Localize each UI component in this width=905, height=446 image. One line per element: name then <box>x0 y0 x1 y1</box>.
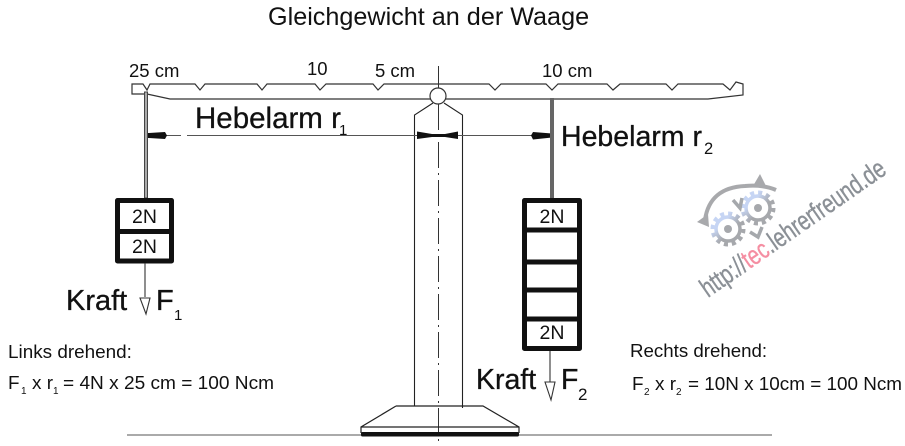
left weight group <box>118 92 172 314</box>
F1 subscript: 1 <box>21 386 27 397</box>
gear left <box>713 214 743 244</box>
pivot <box>430 88 446 104</box>
label: Hebelarm r <box>195 102 341 135</box>
F2: F <box>632 374 644 395</box>
label 10 cm: 10 cm <box>542 60 592 81</box>
force arrow F2 <box>545 351 555 400</box>
centre line <box>438 66 440 442</box>
left formula <box>8 342 274 397</box>
label: Kraft <box>66 285 127 317</box>
heading: lever arm r1 <box>195 102 347 139</box>
equation: = 4N x 25 cm = 100 Ncm <box>63 373 274 394</box>
right weight group <box>524 98 580 400</box>
force label F2 <box>476 364 587 404</box>
caption: Rechts drehend: <box>630 340 767 361</box>
stand base <box>361 406 519 433</box>
left string <box>144 92 148 198</box>
equation: = 10N x 10cm = 100 Ncm <box>688 374 902 395</box>
r2: x r <box>655 374 676 395</box>
arrowheads <box>697 174 767 227</box>
label 10: 10 <box>307 58 328 79</box>
r1: x r <box>32 373 53 394</box>
F1: F <box>8 373 20 394</box>
stand <box>361 103 519 436</box>
dimension line left <box>147 134 181 136</box>
gear right <box>743 193 773 223</box>
weight label bottom: 2N <box>540 322 564 344</box>
base plate <box>361 432 519 436</box>
watermark <box>694 153 892 304</box>
label: Hebelarm r <box>561 121 702 153</box>
title: Gleichgewicht an der Waage <box>268 3 589 31</box>
arrowheads centre <box>417 132 458 139</box>
right weight frame <box>524 200 580 348</box>
label 25 cm: 25 cm <box>129 60 179 81</box>
ground line <box>127 434 772 436</box>
right formula <box>630 340 902 398</box>
icon: gears <box>697 174 776 244</box>
beam outline <box>132 82 743 99</box>
subscript: 1 <box>339 122 347 139</box>
force label F1 <box>66 285 182 324</box>
arrowhead left <box>147 132 167 139</box>
subscript: 2 <box>704 140 713 158</box>
stand column <box>414 103 462 408</box>
label 5 cm: 5 cm <box>375 60 415 81</box>
caption: Links drehend: <box>8 342 132 363</box>
lever arm dimension line <box>147 132 552 140</box>
heading: lever arm r2 <box>561 121 713 158</box>
r1 subscript: 1 <box>53 386 59 397</box>
watermark text: http://tec.lehrerfreund.de <box>694 153 892 304</box>
beam <box>132 82 743 104</box>
subscript: 2 <box>578 385 587 404</box>
weight label top: 2N <box>540 206 564 228</box>
weight label bottom: 2N <box>132 236 157 258</box>
check marks <box>733 198 762 237</box>
symbol: F <box>156 285 174 317</box>
right string <box>550 98 554 198</box>
left weight frame <box>118 200 172 261</box>
arrowhead right <box>531 132 552 140</box>
weight label top: 2N <box>132 206 157 228</box>
F2 subscript: 2 <box>644 387 650 398</box>
r2 subscript: 2 <box>676 387 682 398</box>
subscript: 1 <box>174 307 182 324</box>
scale labels <box>129 58 592 81</box>
symbol: F <box>561 364 578 396</box>
arc <box>705 186 776 220</box>
dimension line main <box>187 134 552 136</box>
label: Kraft <box>476 364 536 396</box>
force arrow F1 <box>140 263 150 314</box>
